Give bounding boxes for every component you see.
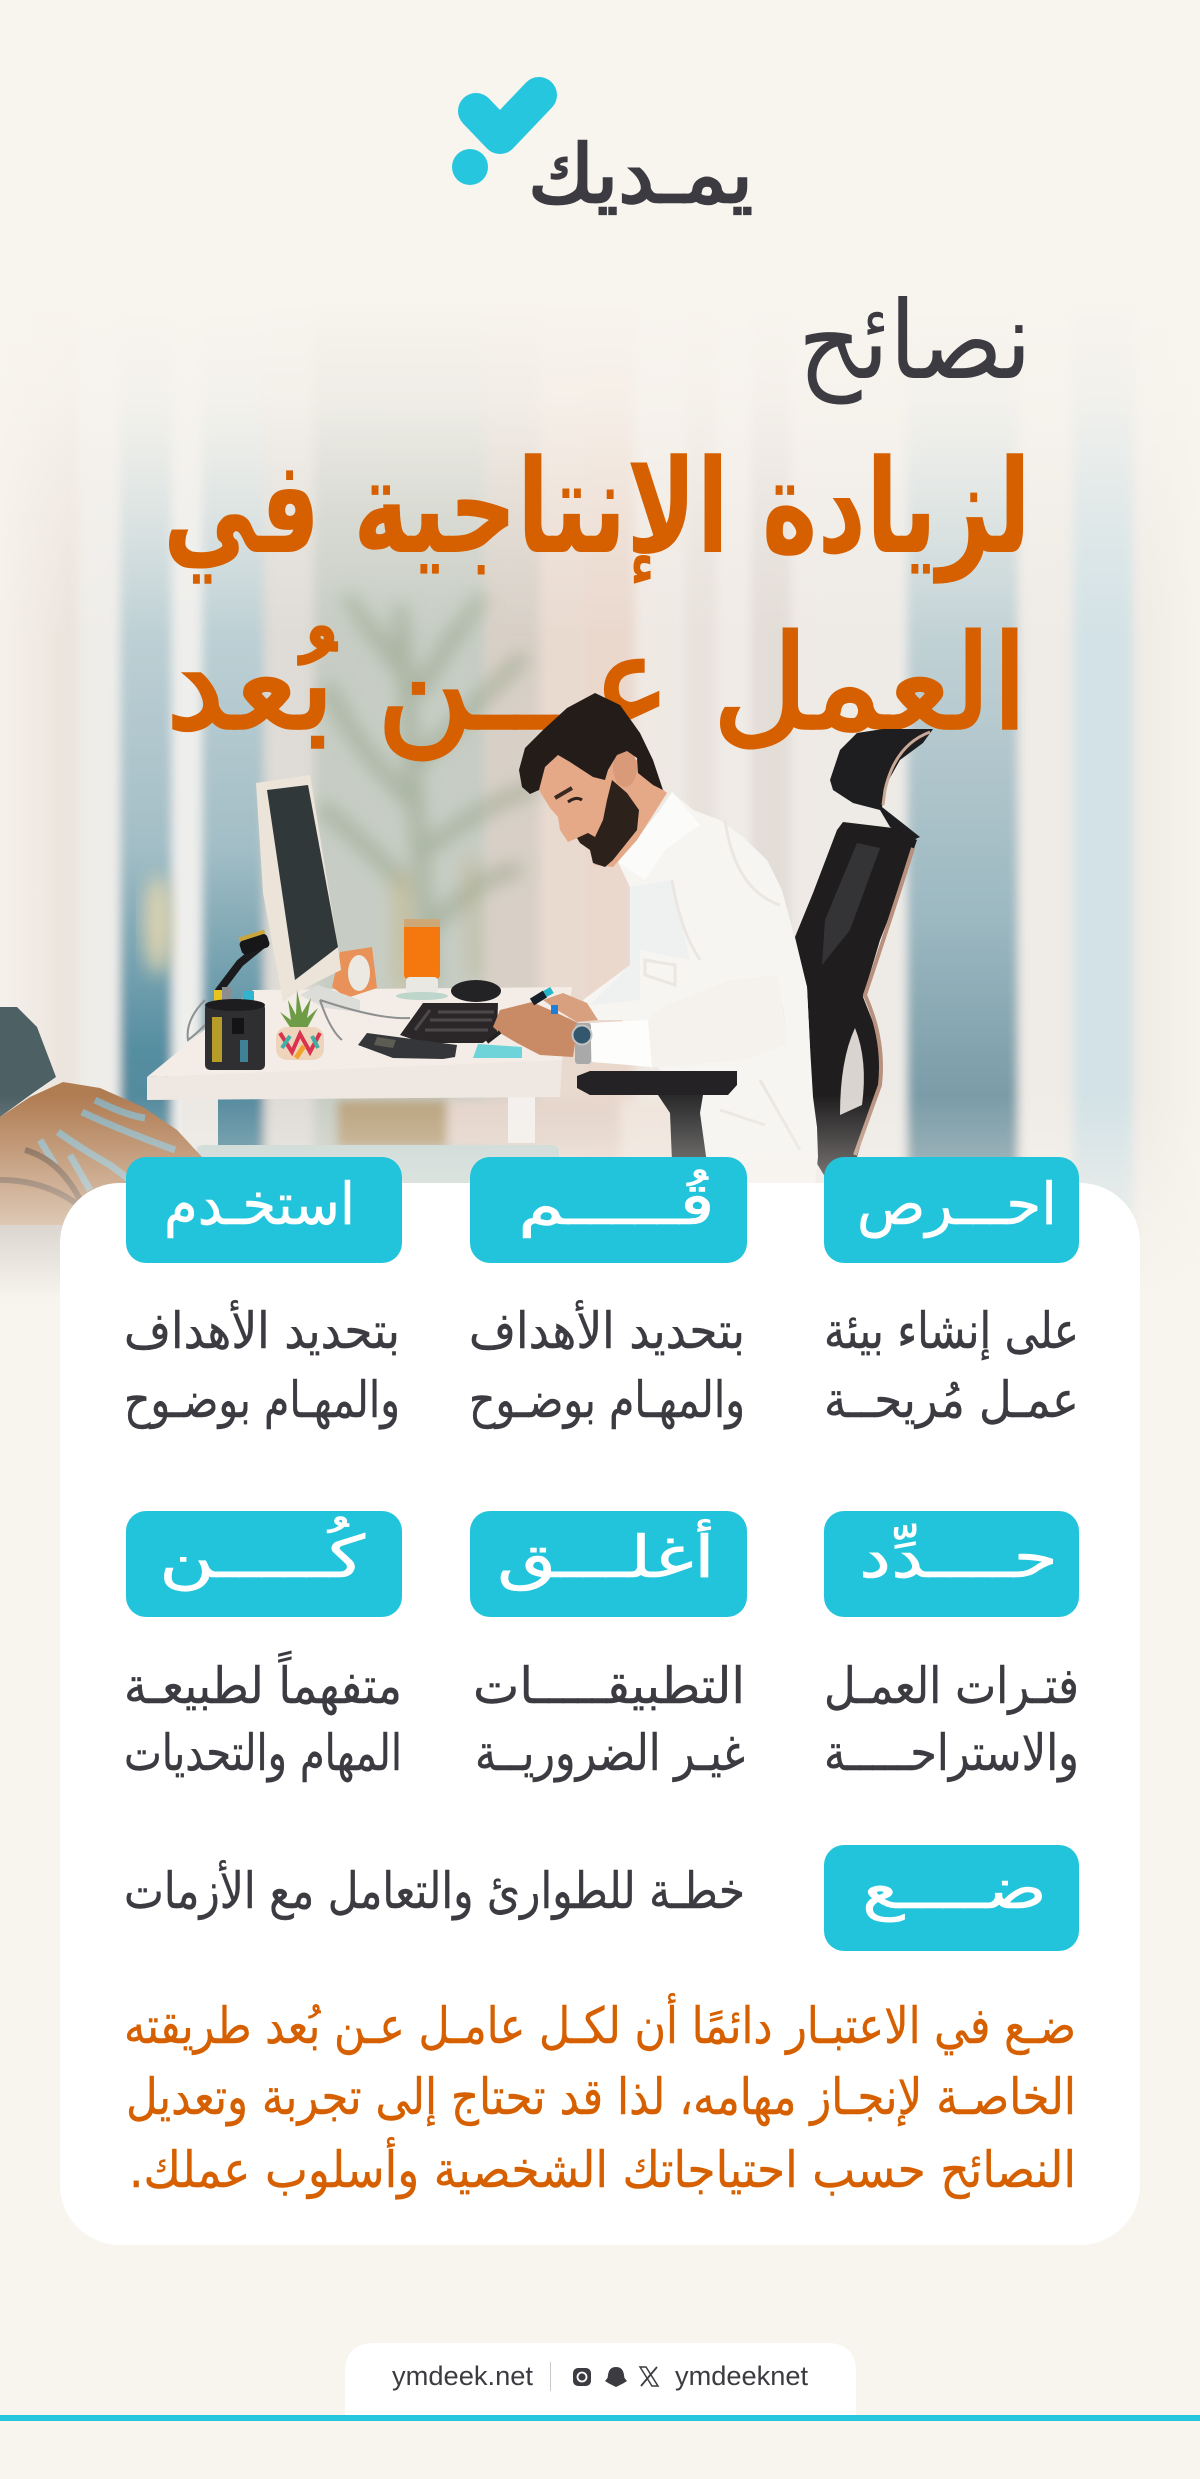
logo: [452, 95, 753, 221]
title line: tips: نصائح: [798, 279, 1032, 405]
white thobe: [583, 792, 818, 1185]
tip 5: [470, 1511, 747, 1783]
desk top: [147, 987, 572, 1077]
icon: dot: [452, 149, 488, 185]
footer handle: ymdeeknet: [675, 2361, 808, 2391]
keyboard: [400, 1003, 498, 1043]
orange glass: [396, 919, 448, 1000]
sleeve: [648, 975, 786, 1068]
button: [470, 1511, 747, 1617]
wordmark: يمـديك: [528, 128, 753, 221]
closing note: [124, 1993, 1076, 2200]
tip 3: [124, 1157, 402, 1430]
chair armrest: [577, 1071, 737, 1185]
body line: والاستراحـــــة: [824, 1724, 1079, 1783]
note line: الخاصـة لإنجـاز مهامه، لذا قد تحتاج إلى تجربة وتعديل: [126, 2068, 1076, 2127]
sofa: [0, 1007, 56, 1117]
button label: استخـدم: [164, 1170, 355, 1238]
button label: ضــــع: [862, 1854, 1047, 1922]
tip 4: [824, 1511, 1079, 1783]
eye and brow: [555, 788, 582, 802]
watch: [572, 1023, 592, 1064]
button: [126, 1157, 402, 1263]
blurred plant fronds: [325, 600, 530, 985]
calculator: [358, 1033, 457, 1059]
lower under-desk colours: [337, 1100, 447, 1148]
footer tab: [345, 2343, 856, 2420]
tip 2: [469, 1157, 747, 1430]
button: [126, 1511, 402, 1617]
sleeve folds: [645, 820, 800, 1150]
ear: [613, 749, 637, 787]
tip 1: [824, 1157, 1079, 1429]
body line: على إنشاء بيئة: [824, 1302, 1079, 1361]
pen: [487, 990, 552, 1042]
frame opening: [840, 1028, 864, 1115]
plant pot: [276, 990, 324, 1060]
sticky note: [473, 1044, 522, 1058]
cuff: [590, 1020, 652, 1067]
button label: احـــرص: [857, 1170, 1057, 1239]
mouse: [451, 980, 501, 1002]
collar: [618, 792, 700, 880]
title: [163, 279, 1032, 760]
floor strip: [197, 1145, 559, 1185]
desk front: [147, 1060, 562, 1100]
body line: بتحديد الأهداف: [124, 1300, 400, 1360]
beard: [577, 780, 639, 867]
footer website: ymdeek.net: [392, 2361, 534, 2391]
right side fade: [1130, 300, 1200, 1300]
button label: حــــدِّد: [859, 1523, 1058, 1591]
note line: ضـع في الاعتبـار دائمًا أن لكـل عامـل عـن بُعد طريقته: [124, 1993, 1076, 2056]
pillow: [0, 1082, 202, 1297]
left side fade: [0, 300, 70, 1300]
button: [470, 1157, 747, 1263]
chair back: [795, 822, 917, 1185]
front placket shading: [590, 880, 690, 1005]
desk lamp: [218, 930, 270, 992]
body line: عمـل مُريحــة: [824, 1371, 1079, 1429]
panel: tips card: [60, 1183, 1140, 2245]
sofa and pillow: [0, 1007, 202, 1297]
chair headrest: [830, 729, 933, 840]
hair: [519, 693, 663, 794]
cables: [188, 1000, 410, 1040]
body line: التطبيقـــــات: [473, 1657, 745, 1715]
button label: قُـــــم: [518, 1169, 715, 1238]
right desk leg: [508, 1097, 535, 1143]
pens: [214, 987, 254, 1011]
man at desk: [487, 693, 933, 1185]
monitor stand: [300, 985, 360, 1012]
button label: أغلـــق: [497, 1519, 715, 1591]
blue clip: [551, 1005, 558, 1014]
body line: المهام والتحديات: [124, 1724, 402, 1783]
icon: X: [640, 2367, 658, 2386]
body line: غيـر الضروريــة: [475, 1724, 745, 1783]
bottom fade of photo into page: [0, 1095, 1200, 1300]
pen holder: [205, 987, 265, 1070]
glare on left curtain: [144, 875, 172, 975]
title line: remote work: العمل عـــن بُعد: [166, 607, 1028, 760]
icon: instagram: [573, 2368, 591, 2386]
neck and face: [539, 755, 667, 867]
icon: check mark: [476, 95, 539, 136]
button: [824, 1157, 1079, 1263]
front hand: [493, 1002, 578, 1057]
copper frame edge: [855, 848, 913, 1155]
body line: خطـة للطوارئ والتعامل مع الأزمات: [124, 1860, 745, 1921]
footer divider: [550, 2362, 551, 2391]
photo: desk setup: [147, 775, 572, 1185]
top fade of photo into page: [0, 296, 1200, 636]
back hand: [543, 993, 598, 1022]
body line: والمهـام بوضـوح: [124, 1371, 400, 1430]
photo background: curtains and blurred plant: [24, 389, 1148, 1215]
button: [824, 1845, 1079, 1951]
button: [824, 1511, 1079, 1617]
note line: النصائح حسب احتياجاتك الشخصية وأسلوب عملك.: [129, 2137, 1076, 2200]
body line: بتحديد الأهداف: [469, 1300, 745, 1360]
icon: snapchat: [605, 2367, 627, 2387]
body line: والمهـام بوضـوح: [469, 1371, 745, 1430]
mesh panel: [822, 843, 880, 965]
tip 7: [124, 1845, 1079, 1951]
body line: متفهماً لطبيعـة: [124, 1650, 402, 1716]
monitor: [256, 775, 341, 1002]
body line: فتـرات العمـل: [824, 1657, 1079, 1715]
left desk leg: [182, 1098, 218, 1146]
button label: كُـــــن: [159, 1516, 365, 1592]
tip 6: [124, 1511, 402, 1783]
orange clock: [332, 947, 377, 998]
footer rule: [0, 2415, 1200, 2421]
